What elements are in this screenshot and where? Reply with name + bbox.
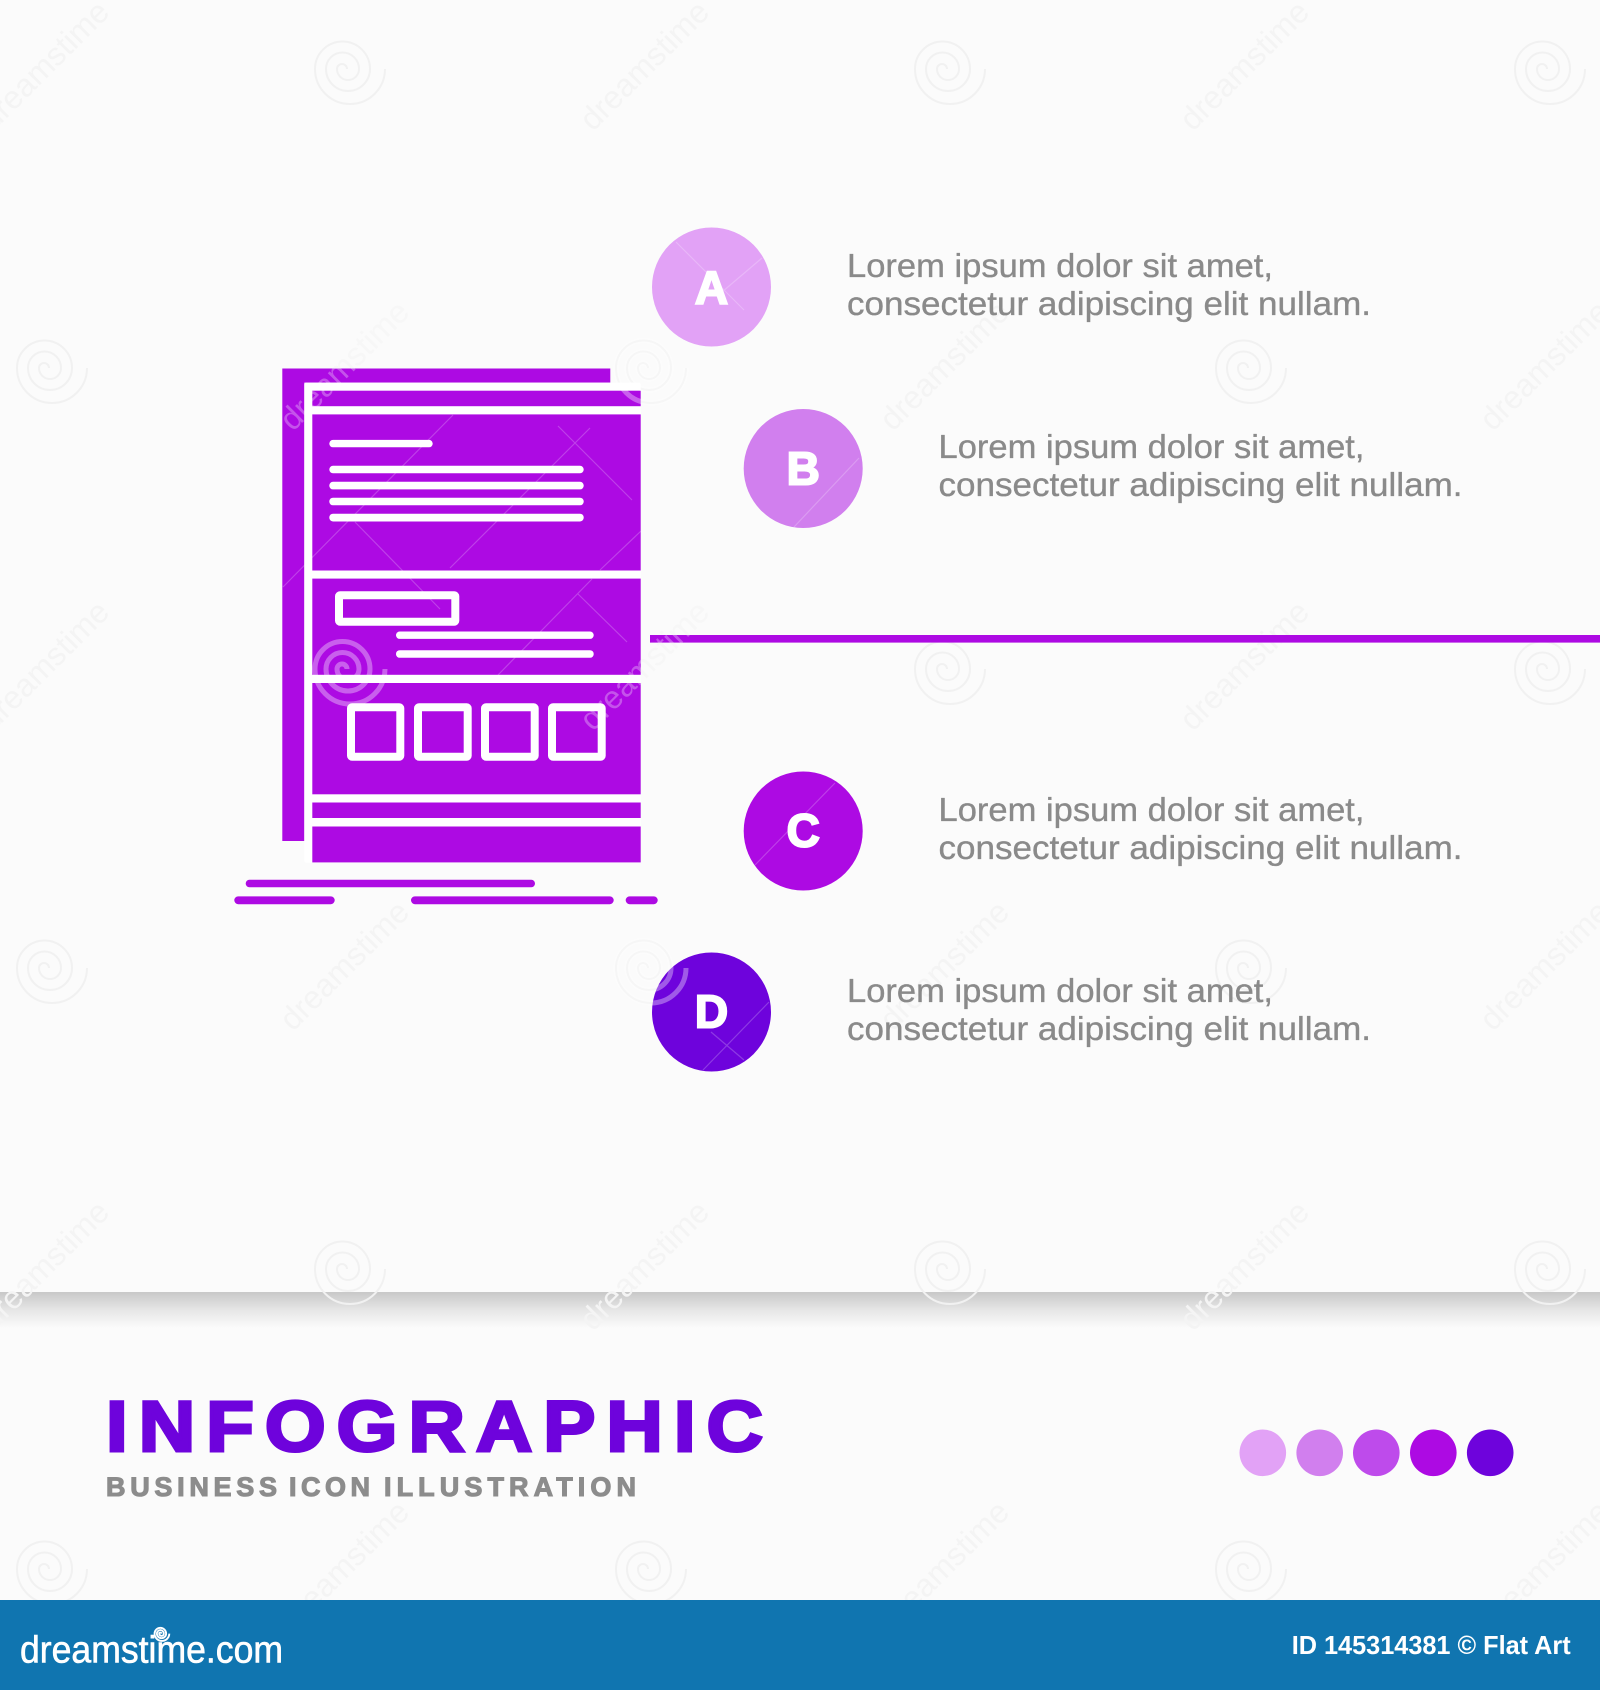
text section (312, 414, 641, 570)
step D (652, 952, 1371, 1072)
watermark pattern: dreamstime (872, 1493, 1016, 1637)
text D (847, 972, 1371, 1047)
circle A (652, 228, 771, 346)
text C: Lorem ipsum dolor sit amet, (938, 791, 1364, 828)
text D: consectetur adipiscing elit nullam. (847, 1010, 1371, 1047)
page header bar (312, 391, 641, 406)
letter C: C (787, 804, 820, 856)
white page frame (304, 383, 641, 863)
watermark pattern: dreamstime (272, 1493, 416, 1637)
watermark overlay on coloured shapes: dreamstime (572, 593, 716, 737)
subtitle: ICON (289, 1472, 370, 1502)
circle B (744, 409, 863, 528)
letter A: A (695, 262, 728, 314)
watermark overlay on coloured shapes: dreamstime (272, 293, 416, 437)
watermark overlay on coloured shapes (272, 242, 859, 1070)
footer bar (0, 1600, 1600, 1690)
ground lines under icon (234, 880, 658, 904)
horizontal connector line (650, 635, 1600, 643)
footer bars (312, 802, 641, 818)
back page (282, 368, 610, 841)
text A (847, 247, 1371, 322)
watermark pattern: dreamstime (572, 1193, 716, 1337)
colour dots legend (1240, 1430, 1513, 1476)
subtitle: BUSINESS (106, 1472, 277, 1502)
circle C (744, 772, 863, 890)
text A: Lorem ipsum dolor sit amet, (847, 247, 1273, 284)
step A (652, 228, 1371, 346)
logo spiral (155, 1628, 169, 1641)
text D: Lorem ipsum dolor sit amet, (847, 972, 1273, 1009)
text A: consectetur adipiscing elit nullam. (847, 285, 1371, 322)
watermark pattern: dreamstime (272, 893, 416, 1037)
icon: web page layout document (282, 368, 641, 863)
text B (938, 428, 1462, 503)
text C (938, 791, 1462, 866)
watermark pattern: dreamstime (872, 893, 1016, 1037)
footer divider shadow band (0, 1292, 1600, 1328)
watermark pattern: dreamstime (272, 293, 416, 437)
title: INFOGRAPHIC (106, 1388, 774, 1467)
text B: consectetur adipiscing elit nullam. (938, 466, 1462, 503)
letter D: D (695, 986, 728, 1038)
step B (744, 409, 1462, 528)
thumbnails section (312, 683, 641, 794)
subtitle (106, 1472, 636, 1502)
watermark pattern: dreamstime (572, 593, 716, 737)
watermark pattern: dreamstime (1172, 593, 1316, 737)
circle D (652, 952, 771, 1072)
watermark pattern: dreamstime (1172, 1193, 1316, 1337)
text B: Lorem ipsum dolor sit amet, (938, 428, 1364, 465)
text C: consectetur adipiscing elit nullam. (938, 829, 1462, 866)
subtitle: ILLUSTRATION (384, 1472, 636, 1502)
step C (744, 772, 1462, 890)
watermark pattern: dreamstime (872, 293, 1016, 437)
image id and credit: ID 145314381 © Flat Art (1292, 1630, 1571, 1660)
letter B: B (787, 442, 820, 494)
button section (312, 579, 641, 675)
footer logo: dreamstime.com (20, 1630, 283, 1672)
